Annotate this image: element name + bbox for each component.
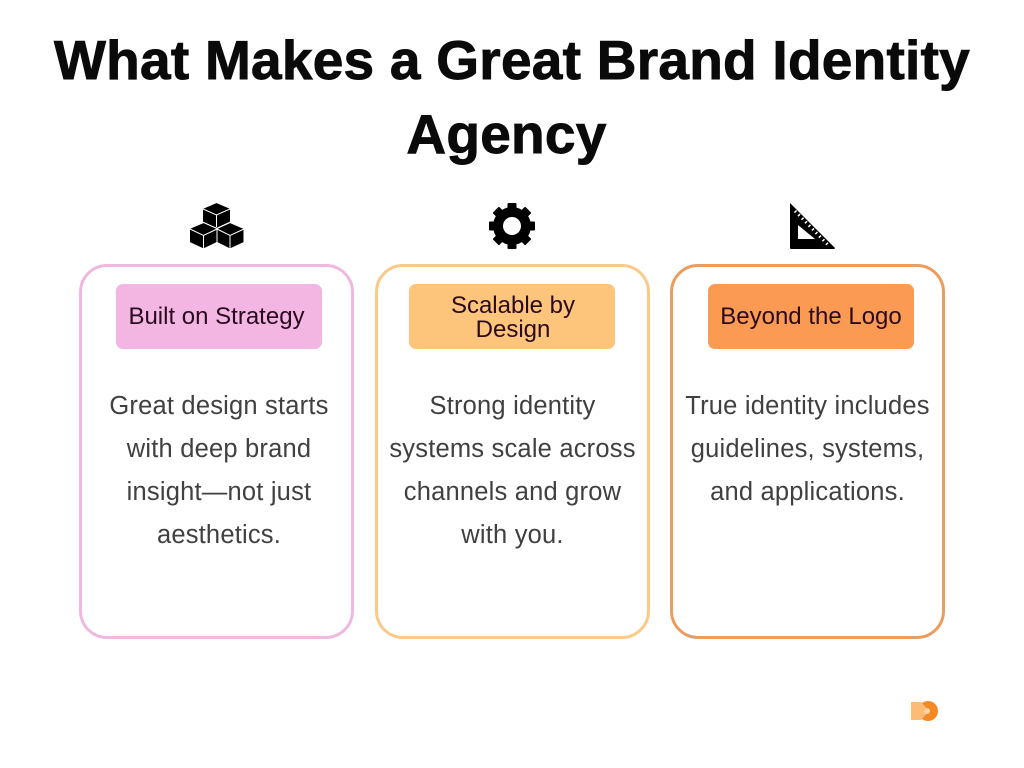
panel: scalable by design xyxy=(375,264,650,639)
text: built on strategy: Great design starts xyxy=(109,392,329,420)
icon: set square xyxy=(790,203,835,249)
title xyxy=(54,29,970,165)
heading box: beyond the logo xyxy=(708,284,914,349)
heading: scalable by design xyxy=(451,292,575,343)
title: What Makes a Great Brand Identity xyxy=(54,29,970,91)
text: beyond the logo: guidelines, systems, xyxy=(691,435,924,463)
text: scalable by design: channels and grow xyxy=(404,478,621,506)
text: beyond the logo: and applications. xyxy=(710,478,905,506)
heading: built on strategy: Built on Strategy xyxy=(128,303,305,330)
text: scalable by design: with you. xyxy=(461,521,564,549)
panel: beyond the logo xyxy=(670,264,945,639)
text: beyond the logo xyxy=(685,392,930,506)
panel: built on strategy xyxy=(79,264,354,639)
icon: cubes xyxy=(190,203,244,248)
heading: beyond the logo: Beyond the Logo xyxy=(720,303,902,330)
heading: scalable by design: Scalable by xyxy=(451,292,575,319)
heading: scalable by design: Design xyxy=(476,316,550,343)
icon: gear xyxy=(489,203,535,249)
text: built on strategy: with deep brand xyxy=(127,435,311,463)
logo xyxy=(911,701,938,721)
title: Agency xyxy=(406,103,607,165)
text: built on strategy: insight—not just xyxy=(127,478,311,506)
heading box: built on strategy xyxy=(116,284,322,349)
text: beyond the logo: True identity includes xyxy=(685,392,930,420)
text: built on strategy: aesthetics. xyxy=(157,521,281,549)
text: scalable by design: Strong identity xyxy=(429,392,596,420)
text: scalable by design xyxy=(389,392,636,549)
heading box: scalable by design xyxy=(409,284,615,349)
text: built on strategy xyxy=(109,392,329,549)
text: scalable by design: systems scale across xyxy=(389,435,636,463)
